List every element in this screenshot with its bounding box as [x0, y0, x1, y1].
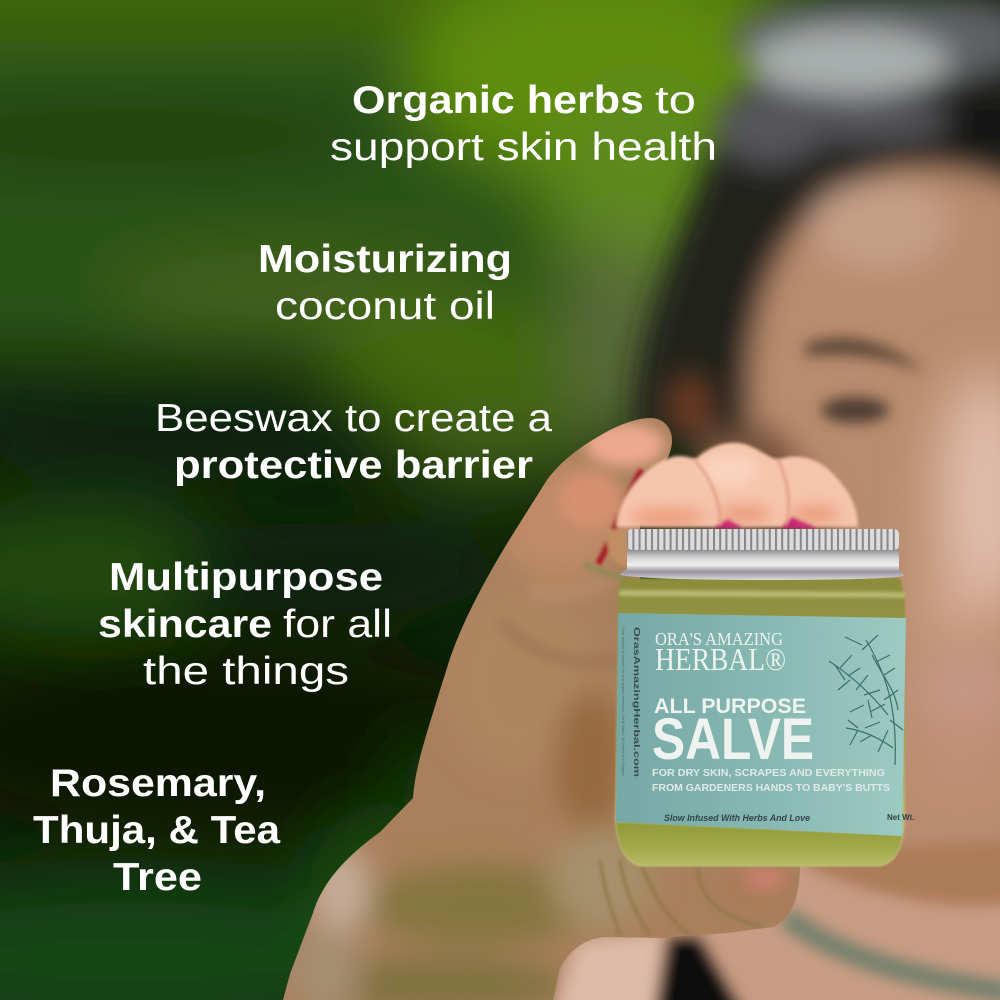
text: rosemary thuja tea tree: Tree: [113, 856, 202, 899]
website along label side: OrasAmazingHerbal.com: [632, 627, 642, 778]
product name: SALVE: [652, 707, 814, 772]
text: moisturizing coconut oil: [258, 238, 512, 328]
salve jar: [615, 529, 915, 866]
magenta lid cap: [712, 516, 820, 528]
brand name: HERBAL®: [655, 641, 786, 677]
face: [750, 169, 1000, 1000]
fine print along label side: Slow infused in organic oil and organic beeswax. Small Batch. All Herbs Are Organic.: [621, 627, 626, 777]
text: multipurpose skincare: for all: [283, 603, 392, 646]
net weight: Net Wt.: [887, 813, 915, 822]
finger behind lid: [607, 528, 632, 567]
text: moisturizing coconut oil: Moisturizing: [258, 238, 512, 281]
brand name: ORA'S AMAZING: [655, 629, 783, 649]
text: beeswax protective barrier: protective barrier: [174, 444, 533, 487]
text: organic herbs: [330, 79, 717, 169]
black top: [652, 935, 755, 1000]
fingers gripping lid: [617, 443, 858, 527]
finger shading: [630, 509, 706, 525]
glass body with green salve: [615, 578, 905, 866]
text: multipurpose skincare: [98, 556, 392, 693]
metal lid: [620, 529, 904, 580]
text: multipurpose skincare: Multipurpose: [109, 556, 383, 599]
text: rosemary thuja tea tree: [33, 762, 280, 899]
finger separations: [695, 460, 789, 526]
product description: [652, 767, 890, 794]
product description: FOR DRY SKIN, SCRAPES AND EVERYTHING: [652, 767, 885, 779]
text: beeswax protective barrier: [155, 397, 552, 487]
icon: herb illustration: [829, 635, 903, 765]
tagline: Slow Infused With Herbs And Love: [664, 813, 810, 823]
text: multipurpose skincare: skincare: [98, 603, 272, 646]
hand holding the jar: [270, 400, 858, 1000]
text: organic herbs: support skin health: [330, 126, 717, 169]
text: organic herbs: to: [655, 79, 696, 122]
text: organic herbs: Organic herbs: [352, 79, 644, 122]
hair: [638, 0, 1000, 450]
teal label: [616, 613, 906, 836]
eye: [821, 397, 889, 423]
text: rosemary thuja tea tree: Rosemary,: [50, 762, 266, 805]
red cord and bead bracelet: [598, 470, 642, 564]
neck and chest: [540, 840, 1000, 1000]
necklace: [785, 915, 1000, 992]
product name: ALL PURPOSE: [654, 695, 806, 718]
product description: FROM GARDENERS HANDS TO BABY'S BUTTS: [652, 782, 890, 794]
text: moisturizing coconut oil: coconut oil: [275, 285, 495, 328]
text: multipurpose skincare: the things: [143, 650, 349, 693]
text: rosemary thuja tea tree: Thuja, & Tea: [33, 809, 280, 852]
text: beeswax protective barrier: Beeswax to create a: [155, 397, 552, 440]
brand name: [655, 629, 786, 677]
eyebrow: [805, 338, 925, 372]
blurred woman: hair, face and clothing: [540, 0, 1000, 1000]
